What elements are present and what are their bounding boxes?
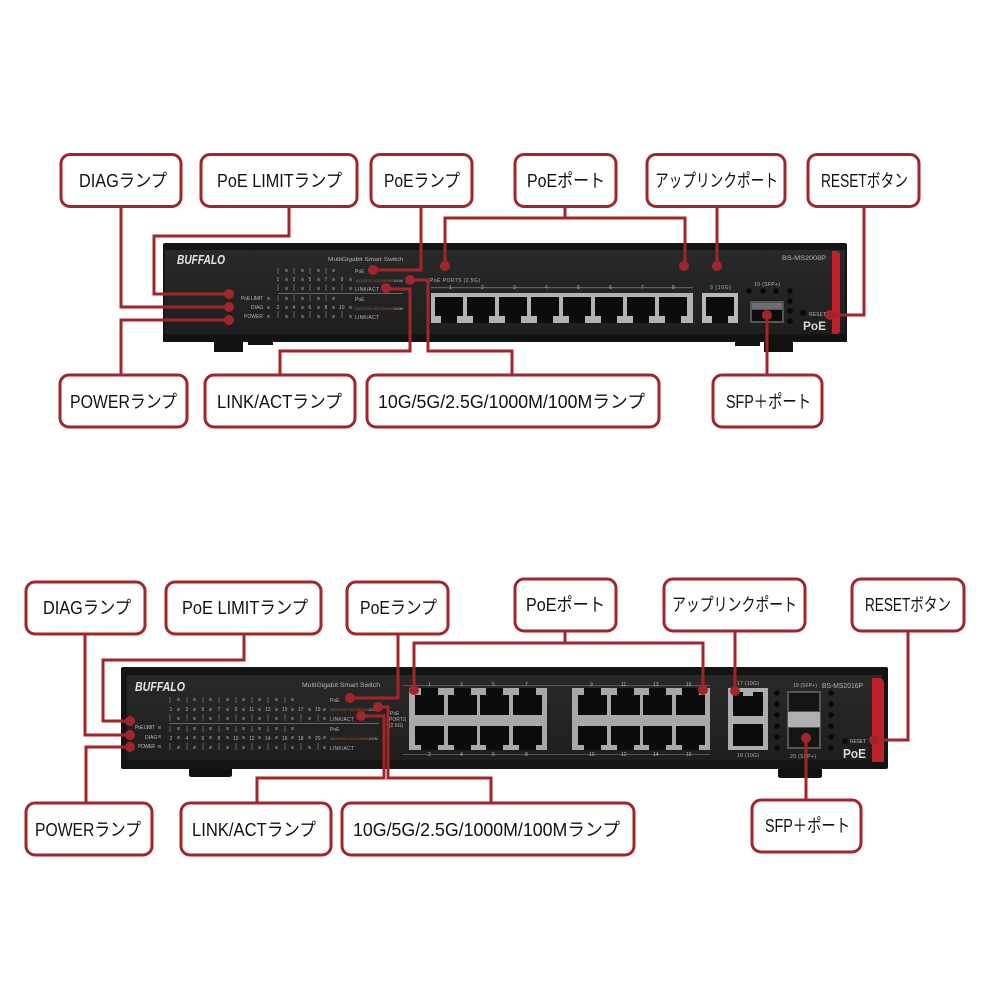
callout: PoE lamp (bottom) [347, 582, 448, 634]
PoE ports 1-16: 8 [525, 752, 528, 758]
PoE ports 1-16: 13 [653, 682, 659, 688]
LED indicators: 19 [315, 707, 321, 713]
callout: POWER lamp (bottom) [26, 803, 152, 855]
PoE ports 1-8: 4 [545, 285, 548, 291]
LED indicators: 10G/5G/2.5G/1000M/100M [355, 278, 403, 283]
callout: DIAG lamp (bottom): DIAGランプ [43, 598, 131, 618]
SFP+ port 10 [749, 282, 790, 323]
LED indicators: PoE [330, 698, 340, 704]
callout: LINK/ACT lamp (top) [205, 375, 355, 427]
callout: LINK/ACT lamp (bottom) [181, 803, 331, 855]
callout: POWER lamp (top) [60, 375, 187, 427]
LED indicators: 2 [276, 305, 280, 311]
callout: PoE port (bottom) [515, 579, 616, 631]
LED indicators: 14 [265, 736, 271, 742]
device: BS-MS2008P 8-port switch [163, 243, 847, 352]
LED indicators: 15 [282, 707, 288, 713]
PoE ports 1-8: 3 [513, 285, 516, 291]
leader lines: top switch [121, 207, 864, 375]
logo: BUFFALO [135, 679, 185, 694]
PoE ports 1-8: 8 [672, 285, 675, 291]
LED indicators: 9 [234, 707, 238, 713]
callout: speed lamp (top): 10G/5G/2.5G/1000M/100Mランプ [378, 392, 645, 412]
callout: RESET button (bottom) [852, 579, 964, 631]
LED indicators: POWER [244, 314, 263, 320]
LED indicators: LINK/ACT [355, 287, 379, 293]
callout: DIAG lamp (top): DIAGランプ [79, 171, 167, 191]
LED indicators: PORTS [389, 717, 407, 723]
LED indicators: 8 [324, 305, 328, 311]
leader lines: bottom switch [85, 631, 908, 803]
callout: SFP+ port (bottom) [752, 800, 861, 852]
LED indicators: 10 [339, 305, 345, 311]
reset button and PoE mark: PoE [843, 747, 866, 761]
callout: PoE port (bottom): PoEポート [526, 595, 605, 615]
LED indicators: 16 [282, 736, 288, 742]
callout: PoE lamp (top): PoEランプ [384, 171, 460, 191]
SFP+ port 10: 10 (SFP+) [754, 282, 780, 288]
product name: MultiGigabit Smart Switch [328, 257, 403, 263]
LED indicators: 6 [308, 305, 312, 311]
LED indicators: 9 [340, 277, 344, 283]
callout: PoE port (top): PoEポート [527, 171, 605, 191]
callout: PoE LIMIT lamp (bottom) [166, 582, 321, 634]
callout: speed lamp (top) [367, 375, 659, 427]
reset button and PoE mark: RESET [850, 739, 866, 745]
callout: LINK/ACT lamp (top): LINK/ACTランプ [217, 392, 342, 412]
LED indicators: 10G/5G/2.5G/1000M/100M [330, 707, 378, 712]
LED indicators: POWER [138, 744, 155, 750]
LED indicators: PoE [355, 297, 365, 303]
uplink ports 17-18: 18 (10G) [737, 753, 759, 759]
reset button and PoE mark: RESET [809, 312, 826, 318]
PoE ports 1-8: 7 [641, 285, 644, 291]
reset button and PoE mark [842, 738, 866, 761]
LED indicators: 5 [308, 277, 312, 283]
callout: PoE LIMIT lamp (top): PoE LIMITランプ [217, 171, 342, 191]
callout: uplink port (bottom): アップリンクポート [672, 595, 797, 615]
callout: RESET button (top) [808, 154, 919, 206]
PoE ports 1-8: 2 [481, 285, 484, 291]
LED indicators: 2 [170, 736, 172, 742]
LED indicators: 8 [218, 736, 220, 742]
callout: uplink port (top) [647, 154, 785, 206]
PoE ports 1-16: 5 [492, 682, 495, 688]
LED indicators: DIAG [145, 735, 157, 741]
LED indicators [241, 268, 403, 321]
red side stripe [872, 678, 884, 762]
callout: POWER lamp (bottom): POWERランプ [35, 820, 141, 840]
callout: SFP+ port (bottom): SFP＋ポート [765, 816, 850, 836]
PoE ports 1-16: 15 [686, 682, 692, 688]
LED indicators: 4 [292, 305, 296, 311]
LED indicators: 3 [186, 707, 188, 713]
PoE ports 1-16: 6 [492, 752, 495, 758]
PoE ports 1-16: 9 [590, 682, 593, 688]
LED indicators: PoE [390, 711, 400, 717]
callout: speed lamp (bottom) [342, 803, 634, 855]
LED indicators: 10G/5G/2.5G/1000M/100M [355, 306, 403, 311]
LED indicators [135, 697, 407, 752]
PoE ports 1-16: 7 [525, 682, 528, 688]
device: BS-MS2016P 16-port switch [121, 667, 888, 778]
PoE ports 1-16 [403, 682, 710, 758]
uplink ports 17-18 [728, 681, 768, 759]
PoE ports 1-16: 1 [428, 682, 431, 688]
callout: PoE port (top) [515, 154, 616, 206]
SFP+ ports 19-20: 20 (SFP+) [790, 754, 816, 760]
LED indicators: 17 [298, 707, 304, 713]
logo: BUFFALO [177, 253, 225, 267]
LED indicators: 18 [298, 736, 304, 742]
callout: uplink port (bottom) [664, 579, 805, 631]
model number: BS-MS2016P [822, 683, 863, 690]
uplink ports 17-18: 17 (10G) [737, 681, 759, 687]
callout: LINK/ACT lamp (bottom): LINK/ACTランプ [192, 820, 316, 840]
callout: PoE lamp (bottom): PoEランプ [360, 598, 437, 618]
product name: MultiGigabit Smart Switch [302, 683, 380, 689]
callout: SFP+ port (top): SFP＋ポート [726, 392, 811, 412]
callout: speed lamp (bottom): 10G/5G/2.5G/1000M/100Mランプ [353, 820, 620, 840]
LED indicators: 11 [249, 707, 254, 713]
LED indicators: LINK/ACT [330, 717, 354, 723]
LED indicators: 10G/5G/2.5G/1000M/100M [330, 736, 378, 741]
callout: PoE LIMIT lamp (bottom): PoE LIMITランプ [182, 598, 308, 618]
LED indicators: 4 [186, 736, 188, 742]
PoE ports 1-8 [430, 278, 693, 323]
LED indicators: 5 [202, 707, 204, 713]
LED indicators: PoE [330, 727, 340, 733]
LED indicators: 7 [324, 277, 328, 283]
uplink port 9 [702, 285, 738, 323]
callout: PoE lamp (top) [371, 154, 472, 206]
callout: RESET button (top): RESETボタン [821, 171, 908, 191]
LED indicators: 20 [315, 736, 321, 742]
PoE ports 1-16: 4 [460, 752, 463, 758]
LED indicators: 3 [292, 277, 296, 283]
LED indicators: 6 [202, 736, 204, 742]
LED indicators: DIAG [251, 305, 263, 311]
callout: SFP+ port (top) [713, 375, 822, 427]
PoE ports 1-16: 10 [589, 752, 595, 758]
callout: RESET button (bottom): RESETボタン [865, 595, 951, 615]
PoE ports 1-8: 5 [577, 285, 580, 291]
LED indicators: (2.5G) [389, 723, 404, 729]
LED indicators: PoE LIMIT [135, 725, 155, 731]
callout: uplink port (top): アップリンクポート [655, 171, 778, 191]
PoE ports 1-16: 12 [621, 752, 627, 758]
LED indicators: 10 [233, 736, 239, 742]
PoE ports 1-16: 2 [428, 752, 431, 758]
PoE ports 1-8: PoE PORTS (2.5G) [430, 278, 480, 284]
model number: BS-MS2008P [782, 255, 826, 262]
callout: DIAG lamp (top) [61, 154, 181, 206]
LED indicators: PoE [355, 269, 365, 275]
PoE ports 1-8: 6 [609, 285, 612, 291]
PoE ports 1-8: 1 [449, 285, 452, 291]
red side stripe [832, 251, 840, 334]
callout: POWER lamp (top): POWERランプ [70, 392, 177, 412]
uplink port 9: 9 (10G) [710, 285, 731, 291]
callout: PoE LIMIT lamp (top) [201, 154, 357, 206]
LED indicators: LINK/ACT [330, 746, 354, 752]
reset button and PoE mark [800, 310, 826, 333]
LED indicators: 1 [276, 277, 280, 283]
reset button and PoE mark: PoE [803, 319, 826, 333]
PoE ports 1-16: 11 [621, 682, 626, 688]
LED indicators: LINK/ACT [355, 315, 379, 321]
LED indicators: PoE LIMIT [241, 296, 263, 302]
PoE ports 1-16: 14 [653, 752, 659, 758]
LED indicators: 1 [170, 707, 172, 713]
LED indicators: 13 [265, 707, 271, 713]
switch feet [214, 340, 793, 352]
switch feet [189, 766, 822, 778]
SFP+ ports 19-20 [777, 683, 831, 760]
LED indicators: 12 [249, 736, 255, 742]
callout: DIAG lamp (bottom) [26, 582, 145, 634]
SFP+ ports 19-20: 19 (SFP+) [793, 683, 817, 689]
PoE ports 1-16: 16 [686, 752, 692, 758]
PoE ports 1-16: 3 [460, 682, 463, 688]
LED indicators: 7 [218, 707, 220, 713]
